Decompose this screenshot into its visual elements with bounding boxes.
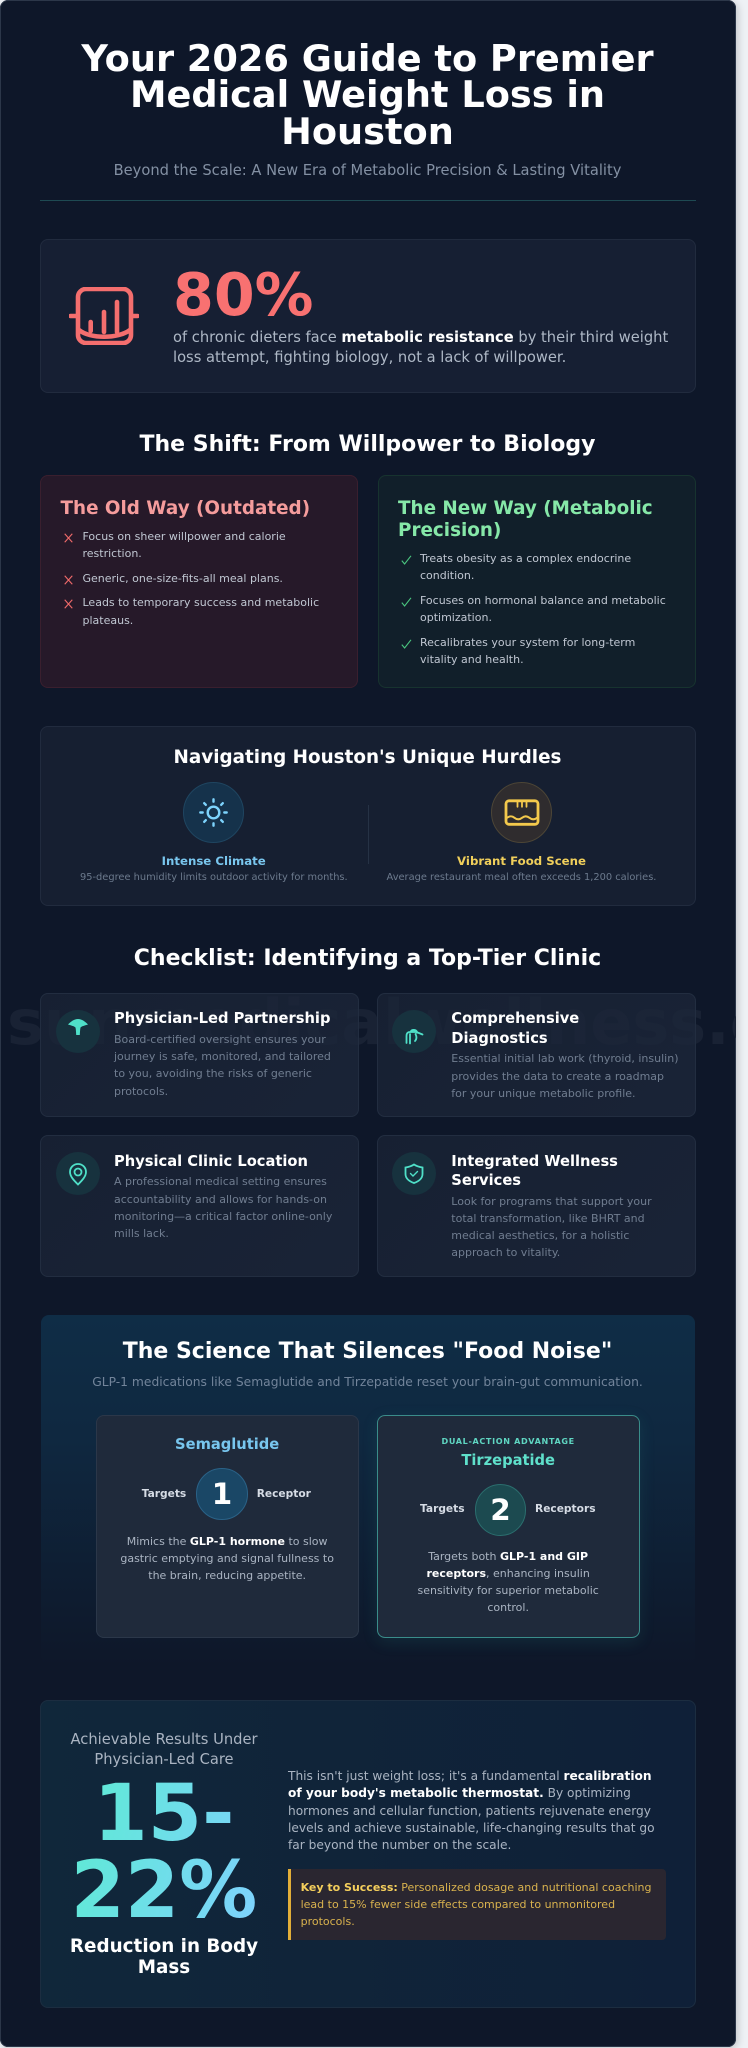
- callout: key to success: Key to Success: Personalized dosage and nutritional coaching: [301, 1881, 652, 1894]
- results paragraph: far beyond the number on the scale.: [288, 1838, 511, 1852]
- results intro: Achievable Results Under: [70, 1731, 258, 1748]
- new way heading: Precision): [398, 520, 501, 541]
- old way item 2: Generic, one-size-fits-all meal plans.: [82, 572, 283, 585]
- results paragraph: [288, 1769, 655, 1852]
- heading: checklist: Checklist: Identifying a Top-Tier Clinic: [134, 946, 601, 971]
- title: Your 2026 Guide to Premier: [81, 37, 654, 80]
- callout: key to success: [288, 1869, 666, 1940]
- card body: Essential initial lab work (thyroid, insulin): [451, 1052, 678, 1065]
- results label: Mass: [138, 1957, 190, 1978]
- icon: scale with bars: [69, 287, 139, 345]
- card title: Comprehensive: [451, 1010, 579, 1027]
- card title: [451, 1010, 579, 1047]
- card body: mills lack.: [114, 1227, 169, 1240]
- new way item 3: Recalibrates your system for long-term: [420, 636, 635, 649]
- card: physical clinic location: [40, 1135, 358, 1277]
- results intro: [70, 1731, 258, 1768]
- new way item 2: Focuses on hormonal balance and metabolic: [420, 594, 666, 607]
- semaglutide description: gastric emptying and signal fullness to: [120, 1552, 334, 1565]
- old way item 3: [64, 596, 319, 626]
- stat text: [173, 329, 668, 366]
- hurdle: climate: [80, 782, 348, 883]
- results stat column: [70, 1731, 258, 1978]
- science subtitle: GLP-1 medications like Semaglutide and Tirzepatide reset your brain-gut communication.: [92, 1375, 643, 1389]
- old way item 3: Leads to temporary success and metabolic: [82, 596, 319, 609]
- new way item 3: vitality and health.: [420, 653, 524, 666]
- new way heading: The New Way (Metabolic: [398, 498, 653, 518]
- old way item 1: restriction.: [82, 547, 142, 560]
- results label: [70, 1936, 258, 1978]
- new way item 2: optimization.: [420, 611, 492, 624]
- semaglutide name: Semaglutide: [175, 1436, 279, 1453]
- card title: Integrated Wellness: [451, 1153, 618, 1170]
- title: [81, 37, 654, 153]
- panel: new way: [378, 475, 696, 688]
- science heading: The Science That Silences "Food Noise": [123, 1339, 612, 1364]
- card body: journey is safe, monitored, and tailored: [114, 1050, 331, 1063]
- card: comprehensive diagnostics: [377, 993, 696, 1117]
- stat text: loss attempt, fighting biology, not a lack of willpower.: [173, 349, 566, 366]
- card title: Diagnostics: [451, 1030, 548, 1047]
- dual-action tag: DUAL-ACTION ADVANTAGE: [442, 1437, 575, 1446]
- card: tirzepatide: [377, 1415, 640, 1638]
- hurdles heading: Navigating Houston's Unique Hurdles: [174, 747, 561, 768]
- number circle 2: [475, 1484, 526, 1536]
- card body: for your unique metabolic profile.: [451, 1087, 636, 1100]
- card body: approach to vitality.: [451, 1246, 560, 1259]
- receptor label: Receptor: [257, 1487, 311, 1500]
- big percentage: [69, 1776, 259, 1931]
- tirzepatide description: [417, 1550, 599, 1614]
- card: physician-led partnership: [40, 993, 358, 1117]
- card body: total transformation, like BHRT and: [451, 1212, 645, 1225]
- results paragraph: of your body's metabolic thermostat. By optimizing: [288, 1786, 631, 1800]
- old way item 1: Focus on sheer willpower and calorie: [82, 530, 286, 543]
- tirzepatide description: receptors, enhancing insulin: [426, 1567, 590, 1580]
- climate label: Intense Climate: [162, 854, 266, 868]
- card body: Board-certified oversight ensures your: [114, 1033, 326, 1046]
- icon: food tray: [491, 782, 552, 843]
- semaglutide description: [120, 1535, 334, 1582]
- targets label: Targets: [420, 1502, 465, 1515]
- card body: [451, 1195, 652, 1259]
- targets label: Targets: [142, 1487, 186, 1500]
- icon: caduceus: [56, 1010, 100, 1053]
- card body: accountability and allows for hands-on: [114, 1192, 327, 1206]
- food description: Average restaurant meal often exceeds 1,200 calories.: [387, 872, 656, 883]
- icon: sun: [183, 782, 244, 843]
- stat number: 80%: [173, 261, 313, 329]
- results label: Reduction in Body: [70, 1936, 258, 1956]
- card: semaglutide: [96, 1415, 359, 1638]
- hurdle: food: [386, 782, 656, 883]
- card title: Physical Clinic Location: [114, 1153, 308, 1170]
- panel: old way: [40, 475, 358, 688]
- food label: Vibrant Food Scene: [457, 854, 586, 868]
- new way item 1: [402, 552, 631, 582]
- number circle 2: 2: [490, 1493, 511, 1527]
- semaglutide description: the brain, reducing appetite.: [148, 1569, 306, 1582]
- number circle 1: 1: [212, 1477, 232, 1511]
- big percentage: 15-: [94, 1769, 234, 1859]
- card body: medical aesthetics, for a holistic: [451, 1229, 629, 1242]
- results paragraph: This isn't just weight loss; it's a fundamental recalibration: [288, 1769, 652, 1783]
- receptors label: Receptors: [535, 1502, 596, 1515]
- panel: science: [41, 1315, 695, 1665]
- results paragraph: hormones and cellular function, patients rejuvenate energy: [288, 1804, 651, 1818]
- callout: key to success: lead to 15% fewer side effects compared to unmonitored: [301, 1898, 615, 1911]
- icon: microscope: [392, 1010, 436, 1053]
- big percentage: 22%: [71, 1846, 257, 1936]
- old way item 1: [64, 530, 286, 560]
- card title: [451, 1153, 618, 1189]
- icon: map pin: [56, 1152, 100, 1194]
- card body: to you, avoiding the risks of generic: [114, 1067, 312, 1080]
- tirzepatide name: Tirzepatide: [461, 1452, 555, 1469]
- results text column: [288, 1769, 666, 1940]
- panel: 80% stat: [40, 239, 696, 393]
- icon: shield: [392, 1152, 436, 1194]
- card body: [114, 1033, 331, 1098]
- heading: the shift: The Shift: From Willpower to Biology: [140, 432, 595, 457]
- results paragraph: levels and achieve sustainable, life-changing results that go: [288, 1821, 655, 1835]
- card body: protocols.: [114, 1084, 168, 1098]
- climate description: 95-degree humidity limits outdoor activity for months.: [80, 872, 348, 883]
- semaglutide description: Mimics the GLP-1 hormone to slow: [127, 1535, 328, 1548]
- card body: monitoring—a critical factor online-only: [114, 1210, 332, 1223]
- card body: [451, 1052, 678, 1100]
- new way heading: [398, 498, 653, 541]
- card title: Services: [451, 1172, 521, 1189]
- panel: results: [40, 1700, 696, 2008]
- new way item 1: Treats obesity as a complex endocrine: [420, 552, 631, 565]
- card body: [114, 1175, 332, 1240]
- new way item 2: [402, 594, 666, 624]
- new way item 1: condition.: [420, 569, 474, 582]
- title: Houston: [281, 110, 454, 153]
- tirzepatide description: Targets both GLP-1 and GIP: [428, 1550, 588, 1563]
- card body: Look for programs that support your: [451, 1195, 652, 1208]
- tirzepatide description: sensitivity for superior metabolic: [417, 1584, 599, 1597]
- results intro: Physician-Led Care: [94, 1751, 234, 1768]
- panel: Houston hurdles: [40, 726, 696, 906]
- card: integrated wellness services: [377, 1135, 696, 1277]
- number circle 1: [196, 1468, 248, 1520]
- title: Medical Weight Loss in: [130, 73, 605, 116]
- card body: A professional medical setting ensures: [114, 1175, 327, 1188]
- callout: key to success: protocols.: [301, 1915, 355, 1928]
- subtitle: Beyond the Scale: A New Era of Metabolic Precision & Lasting Vitality: [114, 162, 621, 179]
- card title: Physician-Led Partnership: [114, 1010, 330, 1027]
- new way item 3: [402, 636, 635, 666]
- card body: provides the data to create a roadmap: [451, 1070, 664, 1082]
- stat text: of chronic dieters face metabolic resistance by their third weight: [173, 329, 668, 346]
- tirzepatide description: control.: [487, 1601, 529, 1614]
- old way item 3: plateaus.: [82, 614, 133, 626]
- old way heading: The Old Way (Outdated): [60, 498, 310, 518]
